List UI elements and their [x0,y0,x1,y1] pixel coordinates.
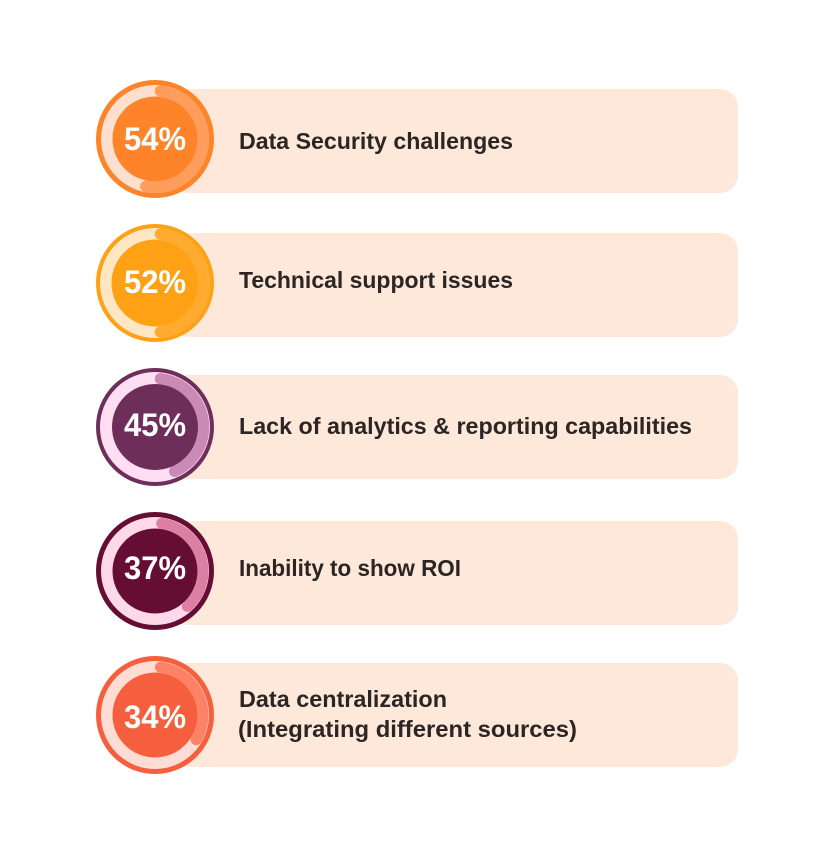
donut: 45% [98,370,212,484]
row: inability to show ROI 37% [98,514,738,628]
label: lack of analytics: Lack of analytics & reporting capabilities [239,413,692,439]
donut: 37% [98,514,212,628]
row: data centralization 34% [98,658,738,772]
donut: 34% [98,658,212,772]
label: data centralization: Data centralization [239,686,447,712]
row: data security challenges 54% [98,82,738,196]
donut: 54%: 54% [124,121,186,157]
panel: inability to show ROI [170,521,738,625]
donut: 52% [98,226,212,340]
donut: 45%: 45% [124,407,186,443]
label: data centralization: (Integrating different sources) [238,716,577,742]
label: technical support: Technical support issues [239,267,513,293]
row: lack of analytics 45% [98,370,738,484]
label: data centralization [238,686,577,742]
donut: 34%: 34% [124,699,186,735]
donut: 52%: 52% [124,264,186,300]
panel: technical support [170,233,738,337]
row: technical support issues 52% [98,226,738,340]
panel: lack of analytics [170,375,738,479]
donut: 37%: 37% [124,550,186,586]
panel: data centralization [170,663,738,767]
panel: data security [170,89,738,193]
label: inability to show ROI: Inability to show ROI [239,555,461,581]
donut: 54% [98,82,212,196]
label: data security: Data Security challenges [239,128,513,154]
